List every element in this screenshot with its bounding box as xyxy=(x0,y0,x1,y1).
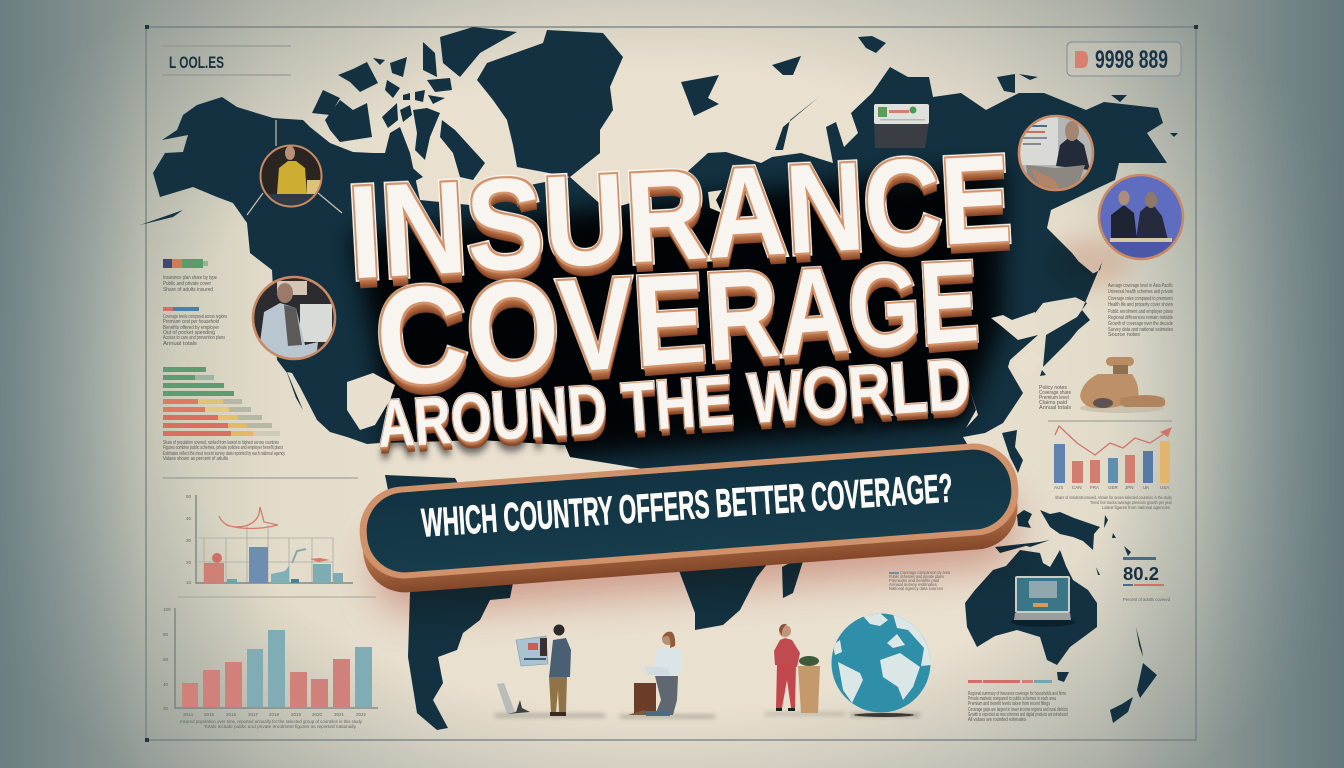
chart: bottom left bar chart: 2017 xyxy=(248,712,259,717)
text block right upper xyxy=(1108,283,1173,338)
text block 1: Share of adults insured xyxy=(163,287,213,293)
chart: mixed bar and curve chart: 30 xyxy=(186,538,192,543)
text block 2: Premium cost per household xyxy=(163,319,219,325)
chart: right bars with trend line: USA xyxy=(1160,485,1169,490)
chart: bottom left bar chart: 2016 xyxy=(226,712,237,717)
chart: bottom left bar chart: 40 xyxy=(163,682,169,687)
text block right upper: Coverage rates compared to premiums xyxy=(1108,296,1173,302)
ground shadows under figures xyxy=(495,713,920,718)
small caption below banner: Coverage comparison by area xyxy=(900,570,950,575)
chart: bottom left bar chart: Totals include public and private enrolment figures as reported nationally xyxy=(204,724,357,729)
text block beside sculpture: Annual totals xyxy=(1039,405,1072,411)
chart: mixed bar and curve chart: 40 xyxy=(186,516,192,521)
chart: right bars with trend line: Latest figures from national agencies xyxy=(1102,505,1171,510)
heading top left xyxy=(162,46,291,75)
stacked legend bar xyxy=(163,259,208,268)
heading top left: L OOL.ES xyxy=(169,53,224,72)
text block beside sculpture: Claims paid xyxy=(1039,400,1067,406)
chart: mixed bar and curve chart xyxy=(186,494,353,585)
text block bottom right: Premium and benefit levels taken from recent filings xyxy=(968,701,1050,707)
text block right upper: Survey data and national estimates xyxy=(1108,327,1173,333)
chart: mixed bar and curve chart: 10 xyxy=(186,580,192,585)
text block 2: Benefits offered by employer xyxy=(163,325,219,331)
chart: right bars with trend line: CAN xyxy=(1072,485,1082,490)
title line 3: AROUND THE WORLD xyxy=(375,343,973,462)
text block right upper: Health life and property cover shown xyxy=(1108,302,1173,308)
map: Americas and Eurasia-Africa mass xyxy=(153,67,1167,630)
text block 2: Coverage levels compared across regions xyxy=(163,314,227,320)
text block 3 xyxy=(163,440,285,462)
chart: right bars with trend line: JPN xyxy=(1125,485,1134,490)
map: northern European islands xyxy=(681,36,1178,150)
frame border xyxy=(145,25,1198,742)
subtitle banner xyxy=(356,440,1023,596)
text block right upper: Growth of coverage over the decade xyxy=(1108,321,1173,327)
text block 1: Insurance plan share by type xyxy=(163,275,217,281)
map: Korea and Indochina cream cut-outs xyxy=(708,190,1042,428)
chart: right bars with trend line: FRA xyxy=(1090,485,1099,490)
chart: right bars with trend line: AUS xyxy=(1054,485,1063,490)
icon: clay sculpture xyxy=(1080,357,1165,413)
text block 1 xyxy=(163,275,217,293)
map: Tasmania and New Zealand xyxy=(1057,627,1157,723)
text block beside sculpture: Coverage share xyxy=(1039,390,1071,396)
small caption below banner: Premiums and benefits paid xyxy=(889,578,939,583)
map: Madagascar xyxy=(782,555,805,598)
text block beside sculpture: Premium level xyxy=(1039,395,1069,401)
top right number badge: 9998 889 xyxy=(1095,46,1168,74)
stat block: Percent of adults covered xyxy=(1123,597,1170,602)
text block 2: Out of pocket spending xyxy=(163,330,215,336)
portrait 4: two presenters xyxy=(1098,174,1184,262)
icon: laptop on Australia xyxy=(1011,576,1075,627)
text block 2: Annual totals xyxy=(163,341,198,347)
text block bottom right: Growth is expected as new schemes and digital products are introduced xyxy=(968,712,1068,718)
title shadow over map xyxy=(350,165,1005,475)
text block bottom right: Coverage gaps are largest in lower income regions and rural districts xyxy=(968,707,1068,713)
chart: bottom left bar chart: 2019 xyxy=(291,712,302,717)
chart: bottom left bar chart: 2018 xyxy=(269,712,280,717)
map: Greenland xyxy=(477,30,623,177)
stat block xyxy=(1123,557,1170,602)
device: insurance card box xyxy=(874,104,929,148)
chart: bottom left bar chart: 20 xyxy=(163,706,169,711)
top right number badge xyxy=(1067,42,1181,76)
portrait 2: person at desk xyxy=(252,276,336,360)
portrait 3: analyst at screen xyxy=(1018,115,1094,195)
chart: bottom left bar chart: 2021 xyxy=(334,712,345,717)
chart: mixed bar and curve chart: 20 xyxy=(186,560,192,565)
text block 3: Estimates reflect the most recent survey data reported by each national agency xyxy=(163,451,285,457)
world map xyxy=(140,27,1178,730)
map: Arctic islands xyxy=(140,27,517,225)
text block bottom right: All values are rounded estimates xyxy=(968,717,1026,723)
map: Southeast Asia islands xyxy=(995,510,1131,575)
text block 1: Public and private cover xyxy=(163,281,211,287)
chart: right bars with trend line: GER xyxy=(1108,485,1119,490)
chart: bottom left bar chart: 80 xyxy=(163,632,169,637)
chart: bottom left bar chart: 60 xyxy=(163,657,169,662)
red blue bar xyxy=(163,307,199,311)
chart: bottom left bar chart: 2015 xyxy=(204,712,215,717)
chart: bottom left bar chart: 100 xyxy=(163,607,171,612)
text block right upper: Regional differences remain notable xyxy=(1108,315,1173,321)
chart: mixed bar and curve chart: 50 xyxy=(186,494,192,499)
chart: bottom left bar chart: 2022 xyxy=(356,712,367,717)
map: Japan and nearby islands xyxy=(1002,262,1102,473)
text block 3: Values shown as percent of adults xyxy=(163,456,228,462)
subtitle banner: WHICH COUNTRY OFFERS BETTER COVERAGE? xyxy=(420,466,954,546)
small caption below banner: National agency data sources xyxy=(889,586,944,591)
map: Australia xyxy=(965,550,1097,665)
text block beside sculpture xyxy=(1039,385,1072,411)
chart: bottom left bar chart: Insured population over time, reported annually for the selected group of countries in this study xyxy=(180,719,363,724)
text block right upper: Source notes xyxy=(1108,332,1141,338)
horizontal stacked bar chart xyxy=(163,367,280,436)
portrait 1: connector lines and yellow jacket person xyxy=(247,120,342,215)
text block 3: Figures combine public schemes, private policies and employer benefit plans xyxy=(163,445,283,451)
title line 1: INSURANCE xyxy=(344,130,1014,307)
small caption below banner: Public schemes and private plans xyxy=(889,574,945,579)
figure: seated woman with box xyxy=(628,632,682,716)
map: gulf cut-out xyxy=(347,373,395,430)
small caption below banner xyxy=(889,570,950,591)
chart: right bars with trend line: Trend line tracks average premium growth per year xyxy=(1090,500,1172,505)
title: Insurance Coverage Around the World xyxy=(344,130,1014,464)
chart: bottom left bar chart xyxy=(163,607,378,729)
text block 3: Share of population covered, ranked from lowest to highest across countries xyxy=(163,440,279,446)
text block right upper: Universal health schemes and private xyxy=(1108,289,1173,295)
chart: right bars with trend line: Share of residents insured, shown for seven selected countries in the study xyxy=(1055,495,1173,500)
pink glow under banner xyxy=(373,237,1130,613)
text block right upper: Public enrolment and employer plans xyxy=(1108,309,1173,315)
stat block: 80.2 xyxy=(1123,564,1159,584)
small caption below banner: Annual survey estimates xyxy=(889,582,938,587)
figure: man holding board beside laptop xyxy=(497,624,571,716)
map: South America xyxy=(385,475,513,730)
chart: bottom left bar chart: 2014 xyxy=(183,712,194,717)
chart: right bars with trend line xyxy=(1054,426,1173,510)
text block bottom right xyxy=(968,680,1068,723)
text block bottom right: Private markets compared to public schemes in each area xyxy=(968,696,1056,702)
icon: globe xyxy=(832,613,931,717)
text block bottom right: Regional summary of insurance coverage for households and firms xyxy=(968,691,1066,697)
figure: woman in red with podium xyxy=(774,624,820,713)
text block 2: Access to care and prevention plans xyxy=(163,335,225,341)
text block 2 xyxy=(163,314,227,347)
text block right upper: Average coverage level in Asia Pacific xyxy=(1108,283,1173,289)
chart: bottom left bar chart: 2020 xyxy=(312,712,323,717)
title line 2: COVERAGE xyxy=(371,237,981,417)
text block beside sculpture: Policy notes xyxy=(1039,385,1068,391)
chart: right bars with trend line: UK xyxy=(1143,485,1149,490)
